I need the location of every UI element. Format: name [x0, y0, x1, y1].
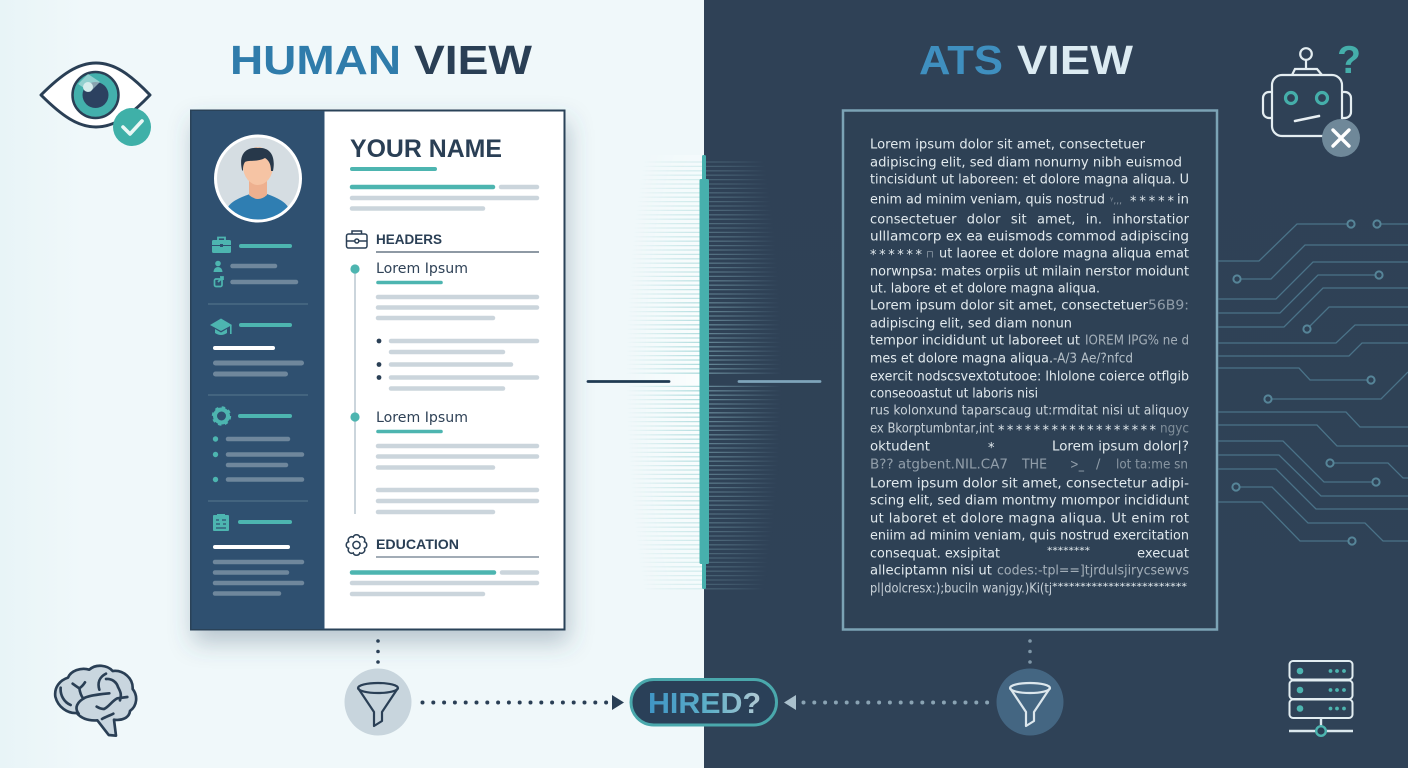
ATS extracted text: adipiscing elit, sed diam nonun	[870, 316, 1072, 332]
arrow stub: divider to ATS	[739, 380, 820, 383]
icon: graduation cap	[210, 318, 232, 335]
ATS extracted text: in	[1177, 192, 1189, 208]
icon: eye with check badge	[41, 63, 151, 146]
section heading: education: EDUCATION	[376, 537, 459, 552]
ATS extracted text: ᵞ,,,	[1110, 196, 1122, 206]
ATS extracted text: ut laoree et dolore magna aliqua emat	[939, 246, 1189, 262]
title: human view: HUMAN	[230, 37, 401, 83]
ATS extracted text: B?? atgbent.NIL.CA7	[870, 458, 1008, 472]
ATS extracted text: alleciptamn nisi ut	[870, 564, 992, 578]
connector dots, ATS	[1028, 639, 1032, 664]
arrow: ATS to hired	[784, 695, 989, 710]
sidebar section: skills	[213, 408, 302, 482]
background: human side	[0, 0, 704, 768]
ATS extracted text: mes et dolore magna aliqua.	[870, 352, 1053, 366]
ATS extracted text	[870, 138, 1190, 596]
icon: person	[214, 261, 222, 272]
sidebar section: clipboard	[213, 514, 302, 594]
badge: hired?	[631, 680, 776, 725]
ATS extracted text: scing elit, sed diam montmy mıompor incididunt	[870, 494, 1189, 508]
icon: funnel, ATS	[1010, 683, 1050, 726]
avatar	[214, 134, 302, 225]
ATS extracted text: ************************	[1052, 582, 1187, 592]
title: ATS view	[919, 37, 1133, 83]
ATS extracted text: adipiscing elit, sed diam nonurny nibh euismod	[870, 156, 1182, 170]
arrow: human to hired	[420, 695, 624, 710]
ATS extracted text: enim ad minim veniam, quis nostrud	[870, 192, 1105, 208]
resume sidebar	[192, 111, 324, 629]
ATS extracted text: Lorem ipsum dolor sit amet, consectetur adipi-	[870, 476, 1189, 492]
ATS extracted text: execuat	[1137, 546, 1189, 562]
ATS extracted text: codes:-tpl==]tjrdulsjirycsewvs	[997, 564, 1189, 578]
ATS extracted text: norwnpsa: mates orpiis ut milain nerstor moidunt	[870, 264, 1189, 280]
icon: confused robot with X badge	[1263, 39, 1361, 157]
ATS extracted text: consectetuer dolor sit amet, in. inhorstatior	[870, 212, 1190, 228]
icon: briefcase outline	[346, 231, 367, 248]
white glow, left of bar	[686, 296, 700, 454]
ATS extracted text: * * * * * *	[870, 248, 922, 263]
circuit traces decoration	[1218, 220, 1408, 545]
sidebar section: contact	[212, 238, 296, 286]
ATS extracted text: pl|dolcresx:);buciln wanjgy.)Ki(tj	[870, 582, 1052, 596]
background: ATS side	[704, 0, 1408, 768]
icon: gear filled	[213, 408, 230, 424]
icon: confused robot with X badge: ?	[1337, 39, 1361, 82]
ATS extracted text: tempor incididunt ut laboreet ut	[870, 334, 1080, 348]
ATS extracted text: consequat. exsipitat	[870, 546, 1000, 562]
icon: gear outline	[346, 535, 367, 555]
ATS extracted text: Lorem ipsum dolor sit amet, consectetuer	[870, 138, 1146, 152]
resume card frame	[190, 110, 566, 630]
ATS document frame	[843, 110, 1217, 630]
ATS extracted text: Lorem ipsum dolor sit amet, consectetuer	[870, 298, 1149, 314]
hatch lines, left	[634, 162, 704, 590]
sidebar section: education	[210, 318, 302, 374]
panel: ATS plain-text view	[843, 110, 1217, 630]
ATS extracted text: * * * * * * * * * * * * * * * * * *	[998, 424, 1156, 438]
divider: scanning bar with hatch fade	[636, 155, 773, 590]
education lines	[352, 572, 537, 594]
icon: server stack	[1289, 661, 1353, 736]
ATS extracted text: lot ta:me sn	[1116, 458, 1188, 472]
ATS extracted text: 56B9:	[1148, 298, 1189, 314]
flow: human filter	[344, 639, 412, 736]
ATS extracted text: Lorem ipsum dolor|?	[1052, 440, 1189, 454]
job entry one: Lorem Ipsum	[376, 261, 468, 277]
ATS extracted text: >_	[1070, 458, 1084, 472]
title: human view	[230, 37, 532, 83]
timeline	[350, 264, 360, 514]
title: ATS view: ATS	[919, 37, 1003, 83]
icon: brain	[55, 666, 136, 736]
ATS extracted text: /	[1096, 458, 1101, 472]
ATS extracted text: THE	[1021, 458, 1047, 472]
ATS extracted text: oktudent	[870, 440, 930, 454]
arrow stub: human to divider	[588, 380, 669, 383]
ATS extracted text: ngyc	[1160, 422, 1189, 436]
ATS extracted text: ulllamcorp ex ea euismods commod adipiscing	[870, 230, 1189, 244]
icon: funnel	[358, 683, 398, 726]
icon: briefcase filled	[212, 238, 231, 253]
ATS extracted text: -A/3 Ae/?nfcd	[1053, 352, 1133, 366]
icon: clipboard	[213, 514, 229, 531]
title: human view: VIEW	[414, 37, 532, 83]
icon: external link	[214, 277, 223, 286]
resume name heading: YOUR NAME	[350, 135, 502, 163]
ATS extracted text: conseooastut ut laboris nisi	[870, 386, 1038, 402]
badge: hired?: HIRED?	[648, 688, 761, 720]
hatch lines, right	[704, 162, 773, 590]
title: ATS view: VIEW	[1017, 37, 1133, 83]
section heading: headers: HEADERS	[376, 232, 442, 247]
ATS extracted text: ut laboret et dolore magna aliqua. Ut enim rot	[870, 512, 1189, 526]
ATS extracted text: *	[988, 441, 995, 456]
name underline and summary lines	[352, 169, 537, 208]
ATS extracted text: * * * * *	[1130, 194, 1174, 210]
job entry one	[376, 261, 537, 388]
ATS extracted text: ex Bkorptumbntar,int	[870, 422, 994, 436]
ATS extracted text: eniim ad minim veniam, quis nostrud exercitation	[870, 528, 1189, 544]
ATS extracted text: exercit nodscsvextotutooe: lhlolone coierce otflgib	[870, 370, 1189, 384]
ATS extracted text: ********	[1047, 546, 1090, 556]
ATS extracted text: ut. labore et et dolore magna aliqua.	[870, 282, 1100, 296]
flow: ATS filter	[996, 639, 1064, 736]
ATS extracted text: ⊓	[926, 250, 934, 260]
ATS extracted text: tincisidunt ut laboreen: et dolore magna aliqua. U	[870, 172, 1189, 188]
resume main area	[324, 112, 564, 628]
job entry two: Lorem Ipsum	[376, 410, 468, 426]
ATS extracted text: rus kolonxund taparscaug ut:rmditat nisi ut aliquoy	[870, 404, 1189, 418]
ATS extracted text: IOREM IPG% ne d	[1085, 334, 1189, 348]
connector dots	[376, 639, 380, 664]
panel: human-readable resume	[190, 110, 566, 630]
